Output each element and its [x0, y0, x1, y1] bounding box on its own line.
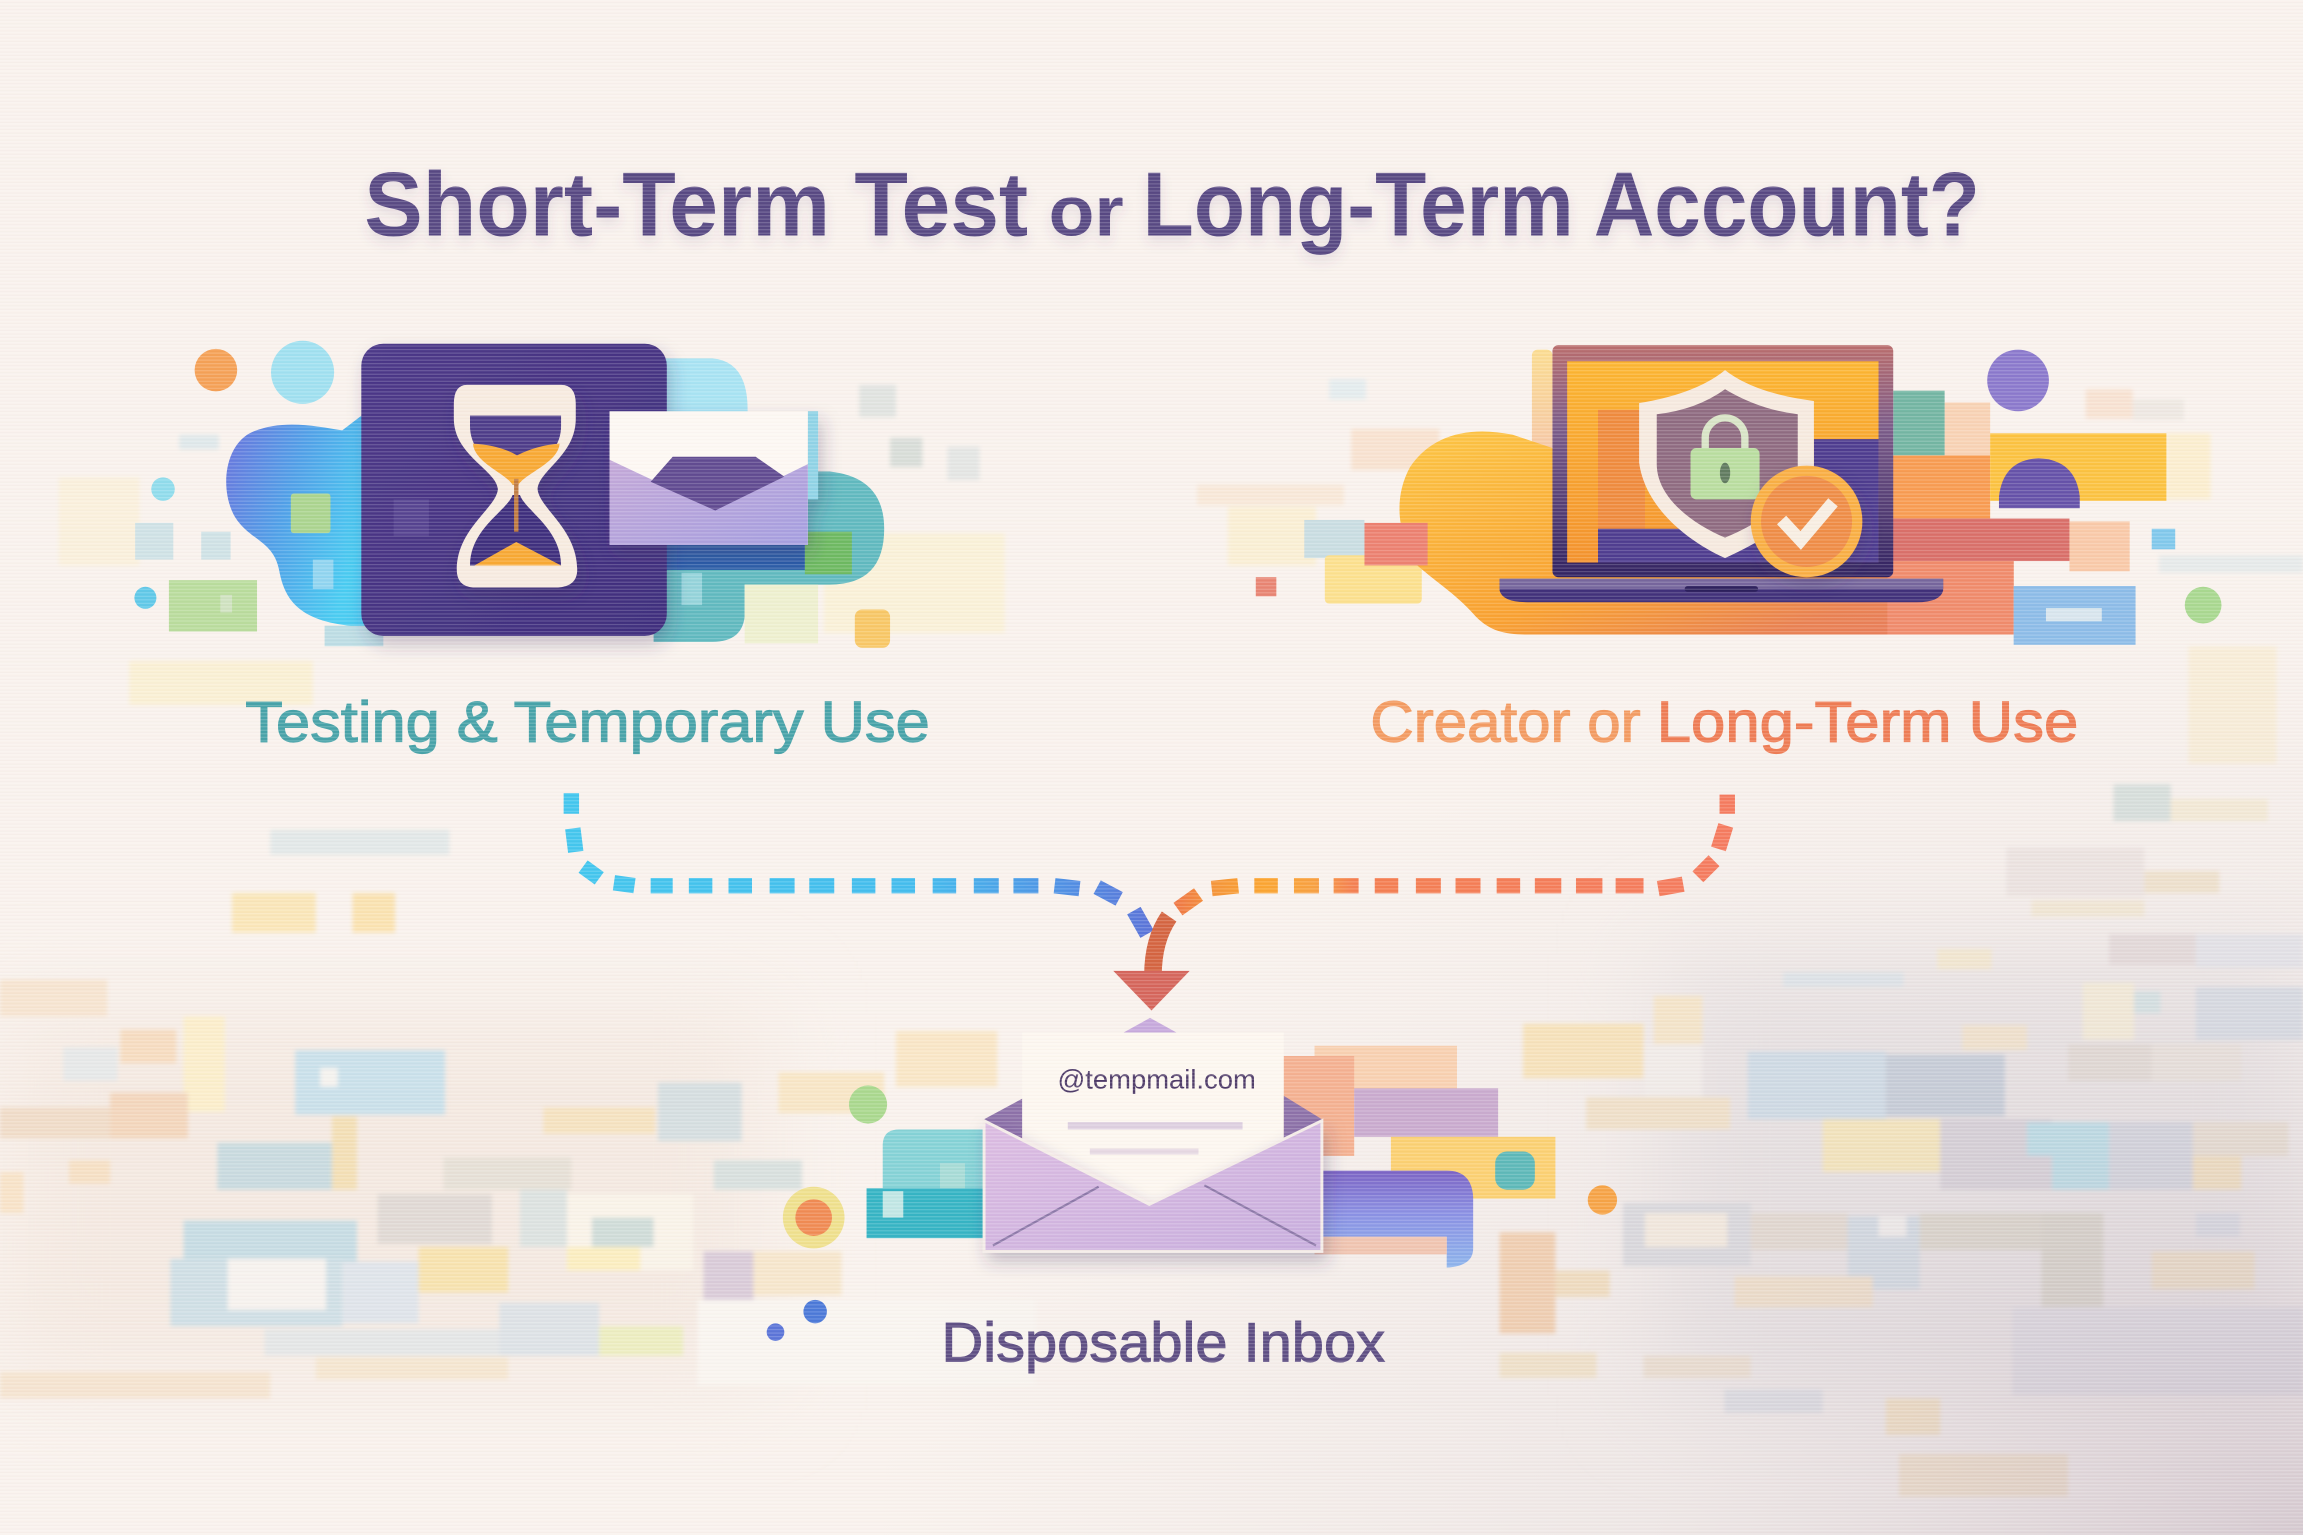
label: creator or long-term use: Long-Term Use [1657, 691, 2078, 755]
title [364, 155, 1980, 256]
purple circle [1987, 350, 2049, 411]
green square chip [291, 494, 330, 533]
background soft colour wash [0, 955, 2303, 1395]
lighter teal patch [682, 573, 702, 605]
salmon block [1284, 1056, 1354, 1156]
pale strip beside laptop [1532, 350, 1552, 452]
arrow target diamond tip [1124, 1018, 1176, 1033]
small blue square [2152, 529, 2175, 549]
title: Long-Term Account? [1143, 155, 1980, 256]
arrow: solid red merge arrow [1113, 917, 1190, 1011]
title: Short-Term Test [364, 155, 1028, 256]
icon: laptop [1500, 345, 1943, 602]
icon: shield with lock [1639, 370, 1814, 558]
green dot [849, 1085, 887, 1124]
yellow bar [1990, 433, 2166, 501]
background pale block pattern [0, 379, 2303, 1497]
green dot [2185, 587, 2221, 623]
pale yellow rectangle [1325, 555, 1422, 604]
decorative dot: small cyan [151, 477, 175, 501]
peach block [2069, 521, 2130, 571]
blue blob [226, 411, 367, 627]
title: or [1049, 172, 1124, 251]
faint card square [394, 499, 429, 536]
target dot [783, 1187, 845, 1248]
blue card [2014, 586, 2136, 645]
green square [805, 532, 852, 574]
decorative teal blocks [867, 1129, 984, 1238]
mauve block [1354, 1088, 1498, 1137]
peach shadow below envelope [1315, 1237, 1447, 1254]
icon: envelope [610, 411, 818, 545]
teal block [1893, 391, 1945, 455]
peach block [1315, 1046, 1457, 1096]
panel: disposable inbox illustration [767, 1018, 1617, 1341]
light cyan blob behind card [661, 358, 748, 426]
label: creator or long-term use: Creator or [1370, 691, 1641, 755]
decorative dot: orange [195, 349, 237, 391]
green note [169, 580, 257, 632]
pale blue squares [135, 523, 231, 560]
blue band [661, 545, 805, 570]
teal chip [1495, 1152, 1535, 1190]
small cyan dot [134, 587, 156, 609]
orange chip [855, 610, 890, 648]
peach block upper [1945, 402, 1990, 455]
label: creator or long-term use [1370, 691, 2078, 755]
label: disposable inbox: Disposable Inbox [941, 1311, 1385, 1374]
orange dot [1588, 1185, 1617, 1215]
arrow: left dashed path [571, 793, 1147, 934]
red rectangle left [1364, 523, 1428, 565]
yellow block [1391, 1137, 1555, 1199]
purple arch [1999, 458, 2080, 508]
icon: hourglass [454, 385, 577, 588]
icon: envelope with paper [984, 1033, 1322, 1251]
purple blue rounded block [1315, 1171, 1473, 1268]
small red square [1256, 577, 1276, 596]
teal blob [654, 471, 884, 642]
arrow: right dashed path [1178, 795, 1727, 909]
pale blue under card [325, 626, 383, 646]
yellow orange blob [1399, 432, 2014, 635]
orange block [1887, 455, 1990, 520]
panel: creator or long-term use illustration [1256, 345, 2221, 645]
pale rectangle left [1304, 520, 1364, 558]
icon: check badge [1751, 466, 1862, 577]
red bar [1887, 518, 2069, 561]
paper text: @tempmail.com [1058, 1063, 1256, 1094]
pale green wash under blob [745, 585, 818, 643]
salmon block [1887, 561, 2014, 635]
label: testing and temporary use: Testing & Temporary Use [245, 691, 930, 755]
panel: testing and temporary use illustration [134, 341, 890, 648]
decorative dot: light cyan [271, 341, 334, 404]
blue dots [767, 1300, 827, 1341]
blob highlight [313, 560, 333, 589]
dark purple card [361, 344, 667, 636]
